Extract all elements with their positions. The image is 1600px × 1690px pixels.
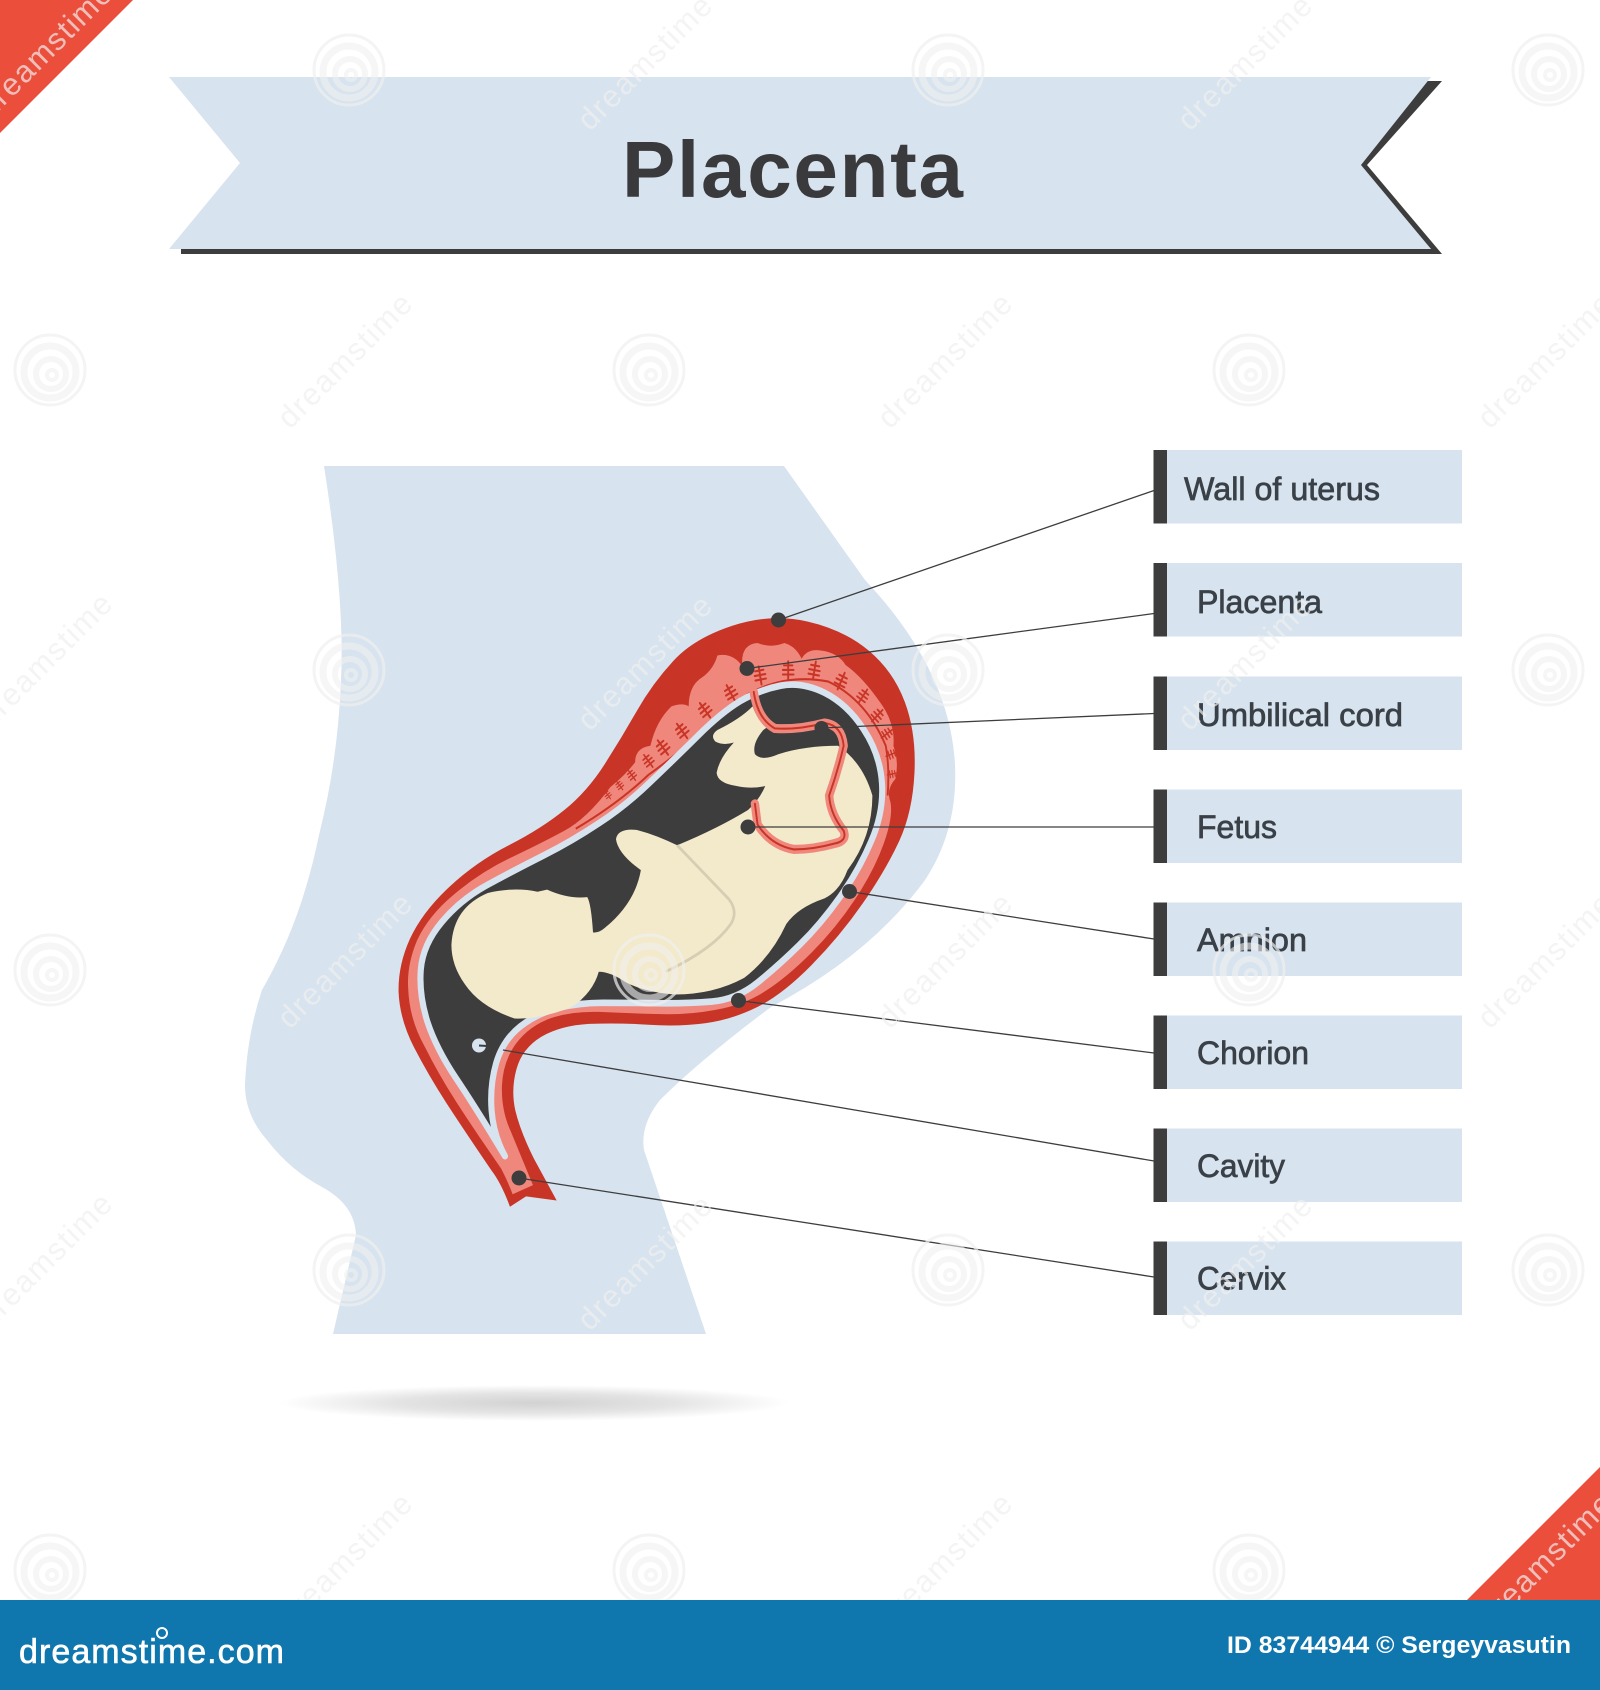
label: fetus: Fetus xyxy=(1197,809,1277,845)
pointer: fetus xyxy=(740,820,1154,834)
pointer: placenta xyxy=(740,614,1154,676)
label: cavity xyxy=(1154,1128,1462,1202)
title banner xyxy=(169,77,1442,254)
pointer: wall of uterus xyxy=(771,490,1154,628)
label: cervix: Cervix xyxy=(1197,1260,1286,1296)
label: placenta xyxy=(1154,563,1462,636)
label: umbilical cord: Umbilical cord xyxy=(1197,697,1403,733)
label: chorion: Chorion xyxy=(1197,1035,1309,1071)
footer bar xyxy=(0,1600,1600,1690)
pointer: cervix xyxy=(512,1170,1154,1277)
watermark layer: dreamstime xyxy=(870,285,1020,435)
pointer: amnion xyxy=(842,884,1154,939)
watermark layer: dreamstime xyxy=(570,587,720,737)
watermark layer: dreamstime xyxy=(870,885,1020,1035)
placental villi xyxy=(576,660,898,829)
watermark layer: dreamstime xyxy=(1170,587,1320,737)
label: amnion: Amnion xyxy=(1197,922,1307,958)
placenta and chorion layer xyxy=(408,643,897,1194)
footer logo: dreamstime.com xyxy=(19,1633,284,1671)
uterus cross-section xyxy=(399,618,915,1207)
red corner: top left xyxy=(0,0,133,133)
fetus body crease xyxy=(666,845,734,972)
umbilical cord xyxy=(754,692,845,849)
label: wall of uterus: Wall of uterus xyxy=(1184,471,1380,507)
cavity with amnion edge xyxy=(420,685,882,1156)
watermark layer: dreamstime xyxy=(870,1485,1020,1635)
ground shadow xyxy=(279,1385,789,1421)
fetus xyxy=(451,706,872,1019)
label: cervix xyxy=(1154,1242,1462,1315)
label: cavity: Cavity xyxy=(1197,1148,1285,1184)
watermark layer: dreamstime xyxy=(1170,1187,1320,1337)
label: chorion xyxy=(1154,1016,1462,1089)
watermark layer: dreamstime xyxy=(270,1485,420,1635)
uterus wall xyxy=(399,618,915,1207)
callout lines and markers xyxy=(472,490,1154,1277)
pointer: chorion xyxy=(731,993,1154,1053)
banner ribbon xyxy=(169,77,1431,249)
label list xyxy=(1154,450,1462,1315)
title: Placenta xyxy=(622,125,964,214)
watermark layer: dreamstime xyxy=(270,885,420,1035)
banner shadow xyxy=(181,81,1442,254)
watermark layer: dreamstime xyxy=(270,285,420,435)
body silhouette xyxy=(245,466,955,1334)
pointer: cavity xyxy=(472,1038,1154,1161)
label: placenta: Placenta xyxy=(1197,584,1322,620)
watermark layer: dreamstime xyxy=(570,1187,720,1337)
label: wall of uterus xyxy=(1154,450,1462,524)
red corner: bottom right xyxy=(1467,1467,1600,1600)
label: amnion xyxy=(1154,902,1462,976)
pointer: umbilical cord xyxy=(814,714,1154,735)
image credit: ID 83744944 © Sergeyvasutin xyxy=(1227,1632,1571,1659)
label: fetus xyxy=(1154,790,1462,863)
label: umbilical cord xyxy=(1154,676,1462,750)
